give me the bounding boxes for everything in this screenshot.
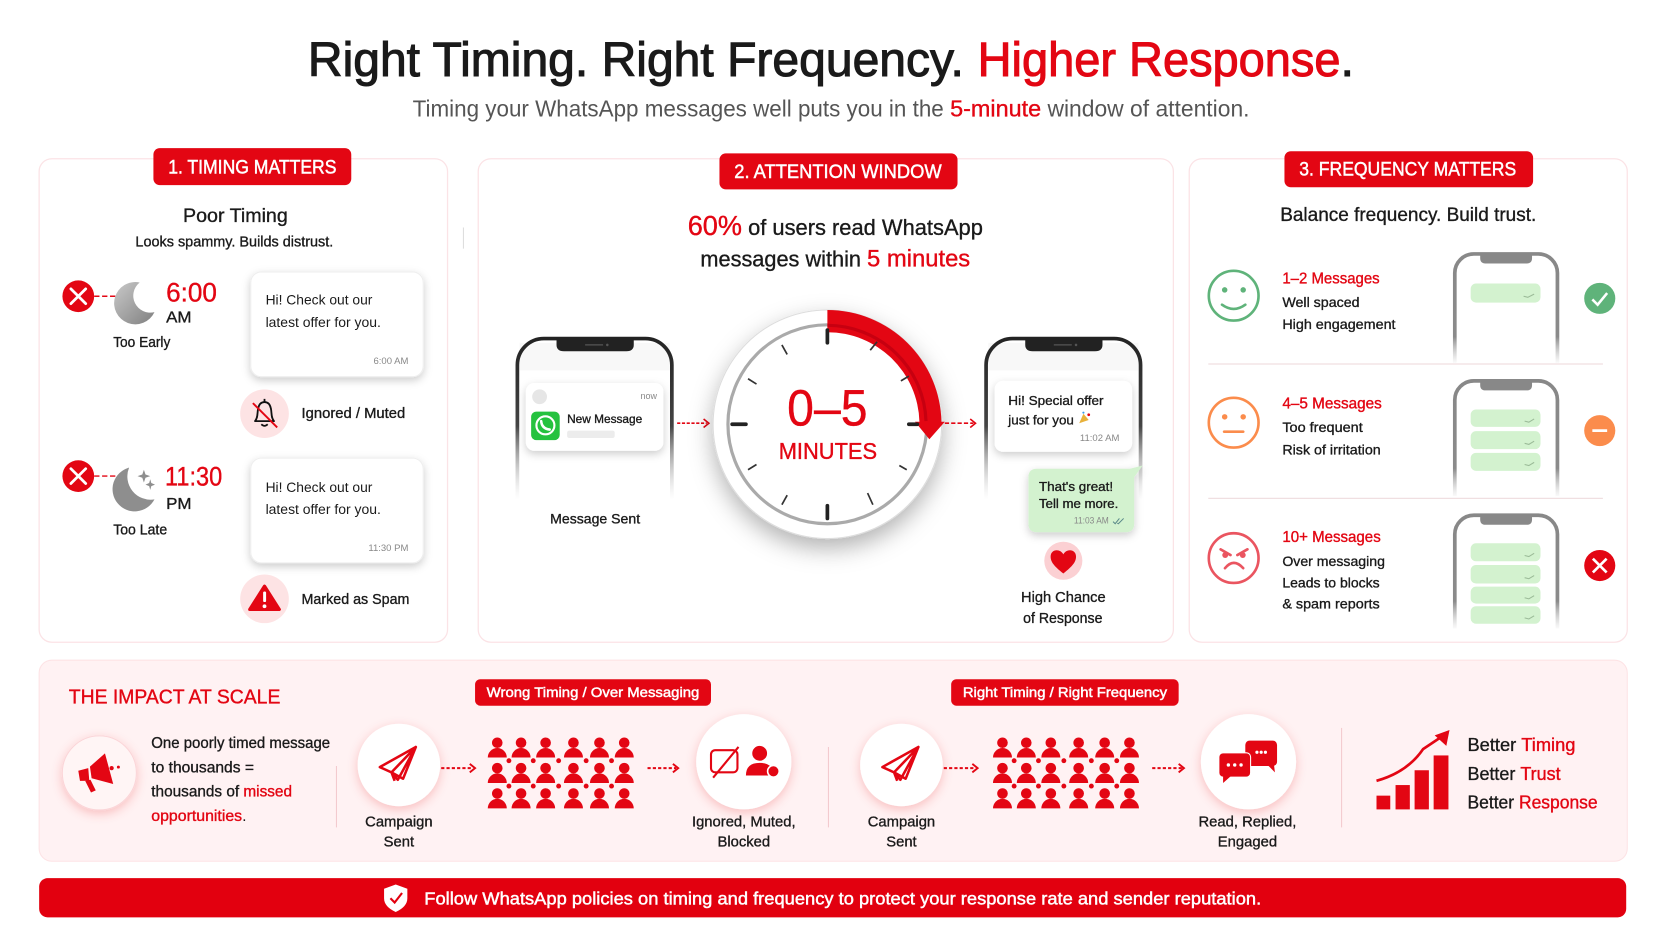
text: poorly timed: to thousands = [151, 759, 254, 776]
label: campaign sent: Sent [384, 834, 414, 850]
badge: wrong timing [475, 679, 711, 706]
text: 10+ messages: Over messaging [1282, 554, 1385, 570]
panel: attention window [478, 153, 1173, 642]
message card early [251, 272, 423, 377]
time: 6:00 AM: 6:00 [166, 278, 217, 308]
label: ignored muted blocked [692, 814, 796, 850]
label: ignored muted blocked: Blocked [717, 834, 770, 850]
badge: frequency matters: 3. FREQUENCY MATTERS [1299, 160, 1516, 181]
title: . [1341, 33, 1354, 87]
text: 1-2 messages: Well spaced [1282, 295, 1360, 311]
text: 10+ messages: Leads to blocks [1282, 576, 1380, 592]
icon: x badge late [62, 460, 116, 492]
text: better timing trust response: Better Response [1467, 791, 1598, 812]
stat: 60 percent: messages within 5 minutes [700, 246, 970, 273]
text: 4-5 messages: Risk of irritation [1282, 442, 1381, 458]
icon: neutral face [1209, 398, 1259, 448]
label: high chance of response: of Response [1023, 611, 1102, 627]
text: 10+ messages: 10+ Messages [1282, 529, 1381, 546]
message card late: Hi! Check out our [266, 480, 373, 496]
text: poorly timed: One poorly timed message [151, 735, 330, 752]
icon: campaign sent right [860, 724, 943, 806]
clock: 0-5 minutes [713, 310, 945, 539]
phone: one bubble [1455, 254, 1557, 363]
label: campaign sent right: Sent [886, 834, 917, 850]
arrow [648, 764, 678, 772]
arrow [441, 764, 475, 772]
icon: cross [1584, 550, 1615, 581]
badge: attention window: 2. ATTENTION WINDOW [734, 162, 942, 183]
incoming message: 11:02 AM [1080, 433, 1119, 444]
text: 4-5 messages [1282, 395, 1382, 458]
phone: four bubbles [1455, 515, 1557, 628]
arrow [1152, 764, 1184, 772]
notification card [526, 383, 663, 451]
badge: right timing: Right Timing / Right Frequency [963, 685, 1168, 701]
text: looks spammy: Looks spammy. Builds distrust. [135, 235, 333, 251]
reply bubble [1028, 466, 1143, 532]
clock text: 0–5 [787, 379, 868, 436]
message card early: Hi! Check out our [266, 293, 373, 309]
icon: moon and stars late [113, 468, 155, 511]
icon: minus [1584, 415, 1615, 446]
message card early: 6:00 AM [373, 356, 408, 367]
clock text [779, 379, 877, 464]
time: 6:00 AM: AM [166, 310, 192, 327]
time: 6:00 AM [166, 278, 217, 327]
subtitle [413, 95, 1250, 121]
text: poorly timed: opportunities. [151, 808, 247, 825]
heading: poor timing: Poor Timing [183, 206, 288, 227]
label: too early: Too Early [113, 335, 171, 351]
icon: happy face [1209, 271, 1259, 321]
panel: impact at scale [39, 660, 1627, 861]
arrow [944, 764, 978, 772]
stat: 60 percent: 60% of users read WhatsApp [688, 210, 983, 241]
text: 10+ messages: & spam reports [1282, 596, 1380, 612]
badge: timing matters [153, 148, 351, 185]
icon: ignored muted blocked [696, 714, 791, 809]
label: campaign sent: Campaign [365, 814, 433, 830]
badge: right timing [951, 679, 1179, 706]
time: 11:30 PM: 11:30 [165, 462, 222, 492]
footer text: Follow WhatsApp policies on timing and frequency to protect your response rate and sender reputation. [424, 889, 1261, 909]
badge: timing matters: 1. TIMING MATTERS [168, 158, 336, 179]
label: high chance of response [1021, 590, 1106, 627]
label: ignored muted: Ignored / Muted [302, 406, 405, 422]
icon: shield [384, 885, 407, 912]
subtitle: Timing your WhatsApp messages well puts you in the [413, 95, 944, 121]
people grid: right [993, 737, 1139, 808]
phone: message sent [517, 339, 672, 499]
message card late: 11:30 PM [368, 543, 408, 554]
badge: wrong timing: Wrong Timing / Over Messaging [487, 685, 699, 701]
label: ignored muted blocked: Ignored, Muted, [692, 814, 796, 830]
label: high chance of response: High Chance [1021, 590, 1106, 606]
icon: muted bell [240, 389, 289, 438]
text: poorly timed: thousands of missed [151, 784, 292, 801]
arrow: to clock [677, 419, 709, 427]
title: Right Timing. Right Frequency. [308, 33, 964, 87]
text: 4-5 messages: Too frequent [1282, 420, 1363, 436]
text: better timing trust response: Better Trust [1467, 763, 1561, 784]
icon: x badge early [62, 280, 116, 312]
message card late [251, 458, 423, 563]
text: poorly timed [151, 735, 330, 825]
icon: moon early [114, 282, 154, 324]
text: 1-2 messages: 1–2 Messages [1282, 271, 1380, 288]
subtitle: 5-minute [950, 95, 1041, 121]
reply bubble: That's great! [1039, 479, 1113, 494]
text: 1-2 messages: High engagement [1282, 317, 1396, 333]
label: campaign sent [365, 814, 433, 850]
label: campaign sent right [868, 814, 935, 850]
panel: timing matters [39, 148, 448, 642]
phone: reply [986, 339, 1143, 532]
heading: balance frequency: Balance frequency. Build trust. [1280, 205, 1536, 226]
red arc arrow [827, 310, 945, 439]
icon: warning triangle [240, 575, 289, 623]
label: message sent: Message Sent [550, 512, 640, 528]
subtitle: window of attention. [1046, 95, 1250, 121]
icon: heart [1044, 542, 1082, 580]
reply bubble: 11:03 AM [1074, 516, 1109, 526]
stat: 60 percent [688, 210, 983, 273]
footer banner [39, 878, 1626, 917]
text: better timing trust response [1467, 734, 1598, 812]
text: 4-5 messages: 4–5 Messages [1282, 395, 1382, 412]
icon: angry face [1209, 533, 1259, 583]
icon: campaign sent [358, 724, 440, 806]
label: read replied engaged: Engaged [1218, 834, 1277, 850]
icon: chat bubbles [1201, 714, 1296, 809]
badge: attention window [719, 153, 958, 189]
label: marked as spam: Marked as Spam [302, 592, 409, 608]
phone: three bubbles [1455, 381, 1557, 496]
label: read replied engaged [1198, 814, 1296, 850]
reply bubble: Tell me more. [1039, 496, 1118, 511]
title: Higher Response [978, 33, 1341, 87]
people grid: wrong [488, 737, 634, 808]
title [308, 33, 1354, 87]
label: read replied engaged: Read, Replied, [1198, 814, 1296, 830]
label: too late: Too Late [113, 522, 167, 538]
message card late: latest offer for you. [266, 502, 381, 518]
notification card: now [641, 391, 658, 401]
time: 11:30 PM: PM [166, 496, 192, 513]
heading: impact at scale: THE IMPACT AT SCALE [69, 687, 280, 709]
label: campaign sent right: Campaign [868, 814, 935, 830]
incoming message: Hi! Special offer [1008, 393, 1104, 408]
time: 11:30 PM [165, 462, 222, 513]
icon: check [1584, 283, 1615, 314]
chart: growth bars and arrow [1377, 730, 1450, 809]
icon: megaphone [62, 736, 136, 810]
incoming message [995, 381, 1132, 452]
panel: frequency matters [1189, 151, 1627, 642]
text: better timing trust response: Better Timing [1467, 734, 1575, 755]
message card early: latest offer for you. [266, 315, 381, 331]
text: 1-2 messages [1282, 271, 1396, 333]
incoming message: just for you [1007, 412, 1074, 427]
arrow: to reply phone [945, 419, 976, 427]
notification card: New Message [567, 412, 642, 426]
clock text: MINUTES [779, 438, 877, 464]
badge: frequency matters [1284, 151, 1533, 187]
text: 10+ messages [1282, 529, 1385, 612]
